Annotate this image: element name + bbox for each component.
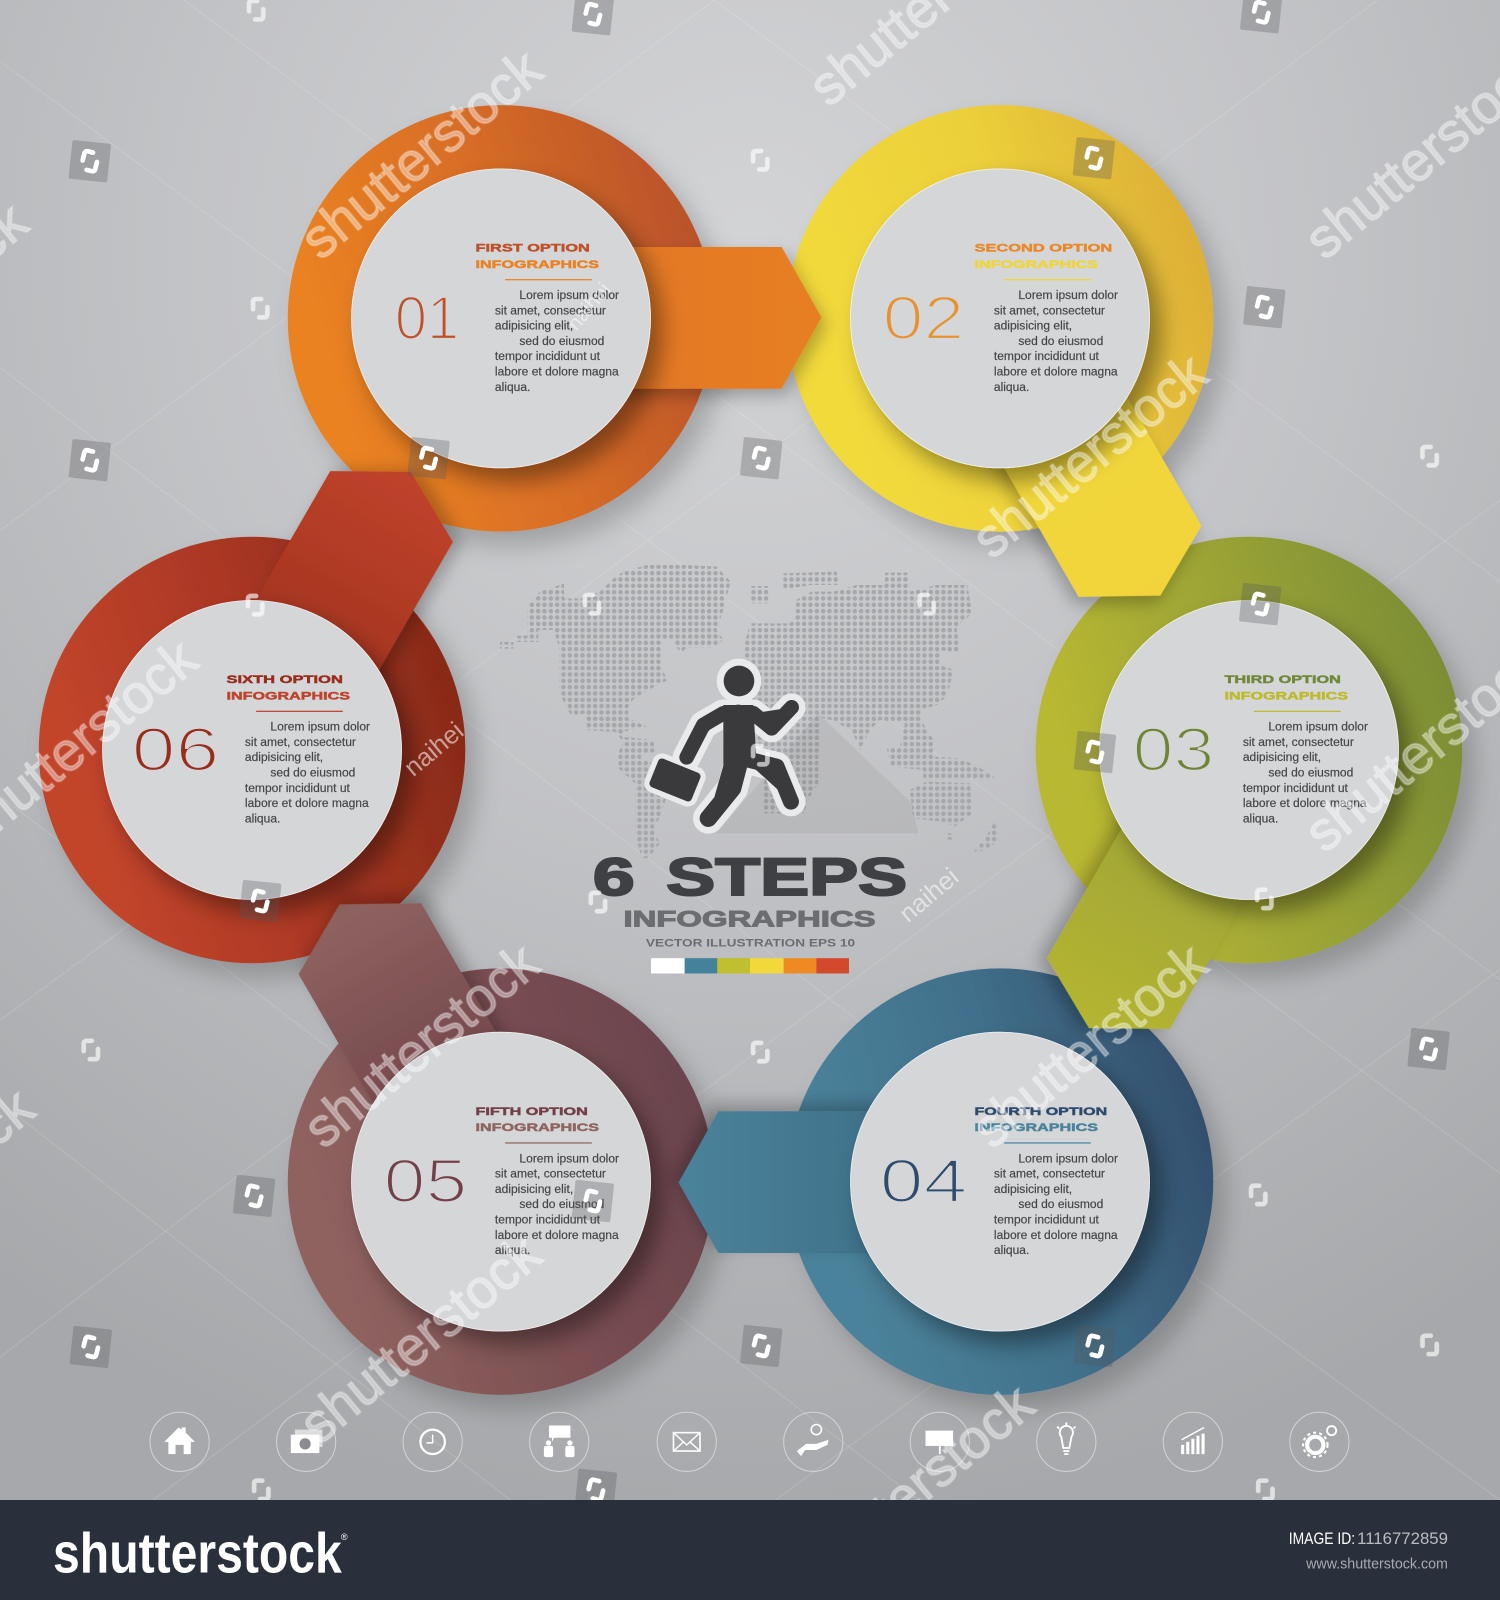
body text: aliqua. bbox=[994, 380, 1029, 394]
watermark text: shutterstock bbox=[960, 341, 1219, 569]
divider bbox=[505, 279, 592, 280]
body text: sit amet, consectetur bbox=[245, 735, 356, 749]
body text: aliqua. bbox=[495, 1243, 530, 1257]
arrow: step 4 to 5 bbox=[679, 1111, 888, 1253]
panel: step 6 ring bbox=[39, 537, 465, 963]
heading: fourth option: FOURTH OPTION bbox=[974, 1106, 1107, 1118]
icon: home bbox=[150, 1412, 209, 1471]
body text: tempor incididunt ut bbox=[994, 1212, 1100, 1226]
icon: running businessman bbox=[650, 659, 792, 818]
body text: Lorem ipsum dolor bbox=[1018, 288, 1118, 302]
body text: labore et dolore magna bbox=[495, 1228, 619, 1242]
step number 02: 02 bbox=[883, 284, 964, 352]
body text: labore et dolore magna bbox=[495, 365, 619, 379]
body text: sit amet, consectetur bbox=[495, 303, 606, 317]
arrow: step 3 to 4 bbox=[1027, 811, 1255, 1063]
body text: tempor incididunt ut bbox=[495, 1212, 601, 1226]
runner outline bbox=[650, 659, 792, 818]
watermark text: shutterstock bbox=[289, 37, 554, 270]
icon: clock bbox=[403, 1412, 462, 1471]
icon row bbox=[150, 1412, 1349, 1471]
body text: adipisicing elit, bbox=[495, 319, 573, 333]
watermark text: shutterstock bbox=[292, 931, 550, 1159]
body text: Lorem ipsum dolor bbox=[270, 720, 370, 734]
runner silhouette bbox=[650, 666, 792, 818]
body text: sit amet, consectetur bbox=[1243, 735, 1354, 749]
body text: labore et dolore magna bbox=[245, 796, 369, 810]
arrow: step 2 to 3 bbox=[994, 379, 1221, 631]
step number 03: 03 bbox=[1133, 715, 1214, 783]
heading: infographics: INFOGRAPHICS bbox=[227, 690, 351, 702]
icon: presentation board bbox=[910, 1412, 969, 1471]
image id: IMAGE ID: bbox=[1289, 1530, 1355, 1548]
body text: aliqua. bbox=[1243, 811, 1278, 825]
arrow: step 6 to 1 bbox=[245, 437, 473, 689]
panel: step 5 content bbox=[352, 1032, 651, 1331]
registered mark: ® bbox=[341, 1532, 348, 1542]
icon: light bulb bbox=[1037, 1412, 1096, 1471]
icon: people talking bbox=[530, 1412, 589, 1471]
body text: Lorem ipsum dolor bbox=[1018, 1151, 1118, 1165]
watermark text: shutterstock bbox=[960, 931, 1219, 1159]
body text: adipisicing elit, bbox=[994, 1182, 1072, 1196]
heading: infographics: INFOGRAPHICS bbox=[1224, 690, 1349, 702]
heading: infographics: INFOGRAPHICS bbox=[476, 1122, 600, 1134]
panel: step 4 ring bbox=[787, 968, 1213, 1395]
body text: aliqua. bbox=[245, 811, 280, 825]
body text: Lorem ipsum dolor bbox=[519, 1151, 619, 1165]
body text: adipisicing elit, bbox=[1243, 750, 1321, 764]
subtitle: infographics: INFOGRAPHICS bbox=[623, 907, 876, 932]
step number 01: 01 bbox=[395, 284, 459, 352]
heading: infographics: INFOGRAPHICS bbox=[974, 1122, 1099, 1134]
heading: infographics: INFOGRAPHICS bbox=[476, 259, 600, 271]
panel: step 1 content bbox=[352, 169, 651, 468]
body text: sit amet, consectetur bbox=[495, 1167, 606, 1181]
footer band bbox=[0, 1500, 1500, 1600]
body text: sed do eiusmod bbox=[1018, 1197, 1103, 1211]
body text: tempor incididunt ut bbox=[245, 781, 351, 795]
divider bbox=[1004, 279, 1091, 280]
divider bbox=[256, 711, 343, 712]
icon: envelope bbox=[657, 1412, 716, 1471]
divider bbox=[1004, 1142, 1091, 1144]
body text: aliqua. bbox=[994, 1243, 1029, 1257]
colour legend bar bbox=[651, 958, 849, 973]
body text: Lorem ipsum dolor bbox=[519, 288, 619, 302]
body text: adipisicing elit, bbox=[495, 1182, 573, 1196]
caption: vector illustration: VECTOR ILLUSTRATION EPS 10 bbox=[646, 937, 855, 949]
body text: tempor incididunt ut bbox=[495, 349, 601, 363]
icon: gears bbox=[1290, 1412, 1349, 1471]
heading: second option: SECOND OPTION bbox=[974, 243, 1112, 255]
body text: sit amet, consectetur bbox=[994, 303, 1105, 317]
body text: Lorem ipsum dolor bbox=[1268, 720, 1368, 734]
body text: aliqua. bbox=[495, 380, 530, 394]
watermark text: shutterstock bbox=[780, 1371, 1045, 1600]
title: 6 steps: STEPS bbox=[666, 848, 907, 907]
icon: money bbox=[277, 1412, 336, 1471]
panel: step 1 ring bbox=[288, 105, 714, 532]
arrow: step 1 to 2 bbox=[612, 247, 821, 389]
panel: step 3 content bbox=[1099, 601, 1398, 899]
icon: hand with coin bbox=[784, 1412, 843, 1471]
body text: sed do eiusmod bbox=[1018, 334, 1103, 348]
body text: adipisicing elit, bbox=[245, 750, 323, 764]
title: 6 steps: 6 bbox=[593, 848, 635, 907]
watermark text: shutterstock bbox=[288, 1221, 553, 1455]
body text: sed do eiusmod bbox=[519, 1197, 604, 1211]
image id: 1116772859 bbox=[1357, 1530, 1448, 1548]
website: www.shutterstock.com bbox=[1305, 1556, 1448, 1572]
footer logo: shutterstock bbox=[53, 1521, 343, 1584]
panel: step 2 content bbox=[851, 169, 1149, 468]
panel: step 5 ring bbox=[288, 968, 714, 1395]
title: 6 steps bbox=[593, 848, 907, 907]
dotted world map bbox=[500, 565, 998, 858]
divider bbox=[505, 1142, 592, 1144]
watermark text: naihei bbox=[399, 717, 469, 782]
heading: fifth option: FIFTH OPTION bbox=[476, 1106, 588, 1118]
body text: sed do eiusmod bbox=[519, 334, 604, 348]
body text: tempor incididunt ut bbox=[1243, 781, 1349, 795]
body text: labore et dolore magna bbox=[994, 365, 1118, 379]
watermark text: naihei bbox=[564, 279, 615, 335]
long shadow of runner bbox=[717, 713, 918, 833]
step number 06: 06 bbox=[132, 715, 219, 783]
panel: step 6 content bbox=[103, 601, 402, 899]
arrow: step 5 to 6 bbox=[279, 869, 506, 1121]
watermark text: naihei bbox=[894, 863, 964, 928]
heading: sixth option: SIXTH OPTION bbox=[227, 674, 343, 686]
panel: step 4 content bbox=[851, 1032, 1149, 1331]
step number 04: 04 bbox=[880, 1147, 967, 1215]
icon: growth chart bbox=[1163, 1412, 1222, 1471]
panel: step 2 ring bbox=[787, 105, 1213, 532]
body text: sed do eiusmod bbox=[270, 766, 355, 780]
heading: first option: FIRST OPTION bbox=[476, 243, 590, 255]
heading: infographics: INFOGRAPHICS bbox=[974, 259, 1099, 271]
heading: third option: THIRD OPTION bbox=[1224, 674, 1341, 686]
body text: sed do eiusmod bbox=[1268, 766, 1353, 780]
step number 05: 05 bbox=[384, 1147, 467, 1215]
panel: step 3 ring bbox=[1036, 537, 1462, 963]
body text: labore et dolore magna bbox=[994, 1228, 1118, 1242]
body text: sit amet, consectetur bbox=[994, 1167, 1105, 1181]
body text: tempor incididunt ut bbox=[994, 349, 1100, 363]
body text: labore et dolore magna bbox=[1243, 796, 1367, 810]
body text: adipisicing elit, bbox=[994, 319, 1072, 333]
divider bbox=[1254, 711, 1341, 712]
